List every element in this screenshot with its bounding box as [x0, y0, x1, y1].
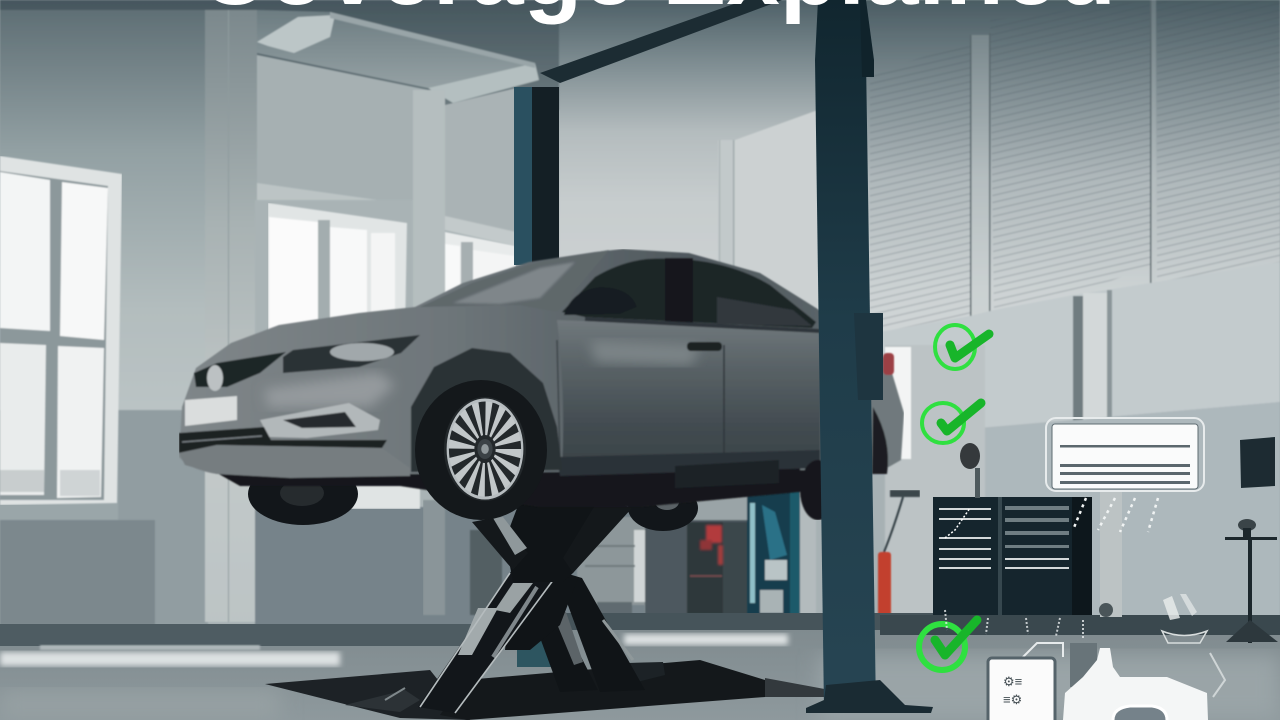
- car: [179, 249, 904, 520]
- window patch under car: [335, 485, 420, 509]
- wing mirror: [564, 287, 637, 315]
- dark wall: [645, 513, 747, 615]
- icon: green check 2: [922, 403, 981, 443]
- windshield: [420, 250, 609, 312]
- bumper lip: [179, 445, 410, 478]
- blind panel A slats: [870, 42, 970, 332]
- engine block: [1063, 648, 1208, 720]
- dashed connectors: [945, 610, 1083, 640]
- red extinguisher: [878, 552, 891, 617]
- fog lamp surround: [260, 403, 380, 438]
- lift pit: [265, 670, 470, 720]
- top crossbeam: [540, 0, 782, 83]
- door handle: [687, 342, 722, 351]
- icon: green check 1: [935, 325, 989, 369]
- wall device: [1240, 437, 1275, 488]
- left wall: [0, 10, 206, 412]
- door panels: [557, 320, 820, 468]
- left window: [0, 156, 122, 505]
- ceiling recess panel: [257, 10, 535, 88]
- ceiling light: [257, 15, 335, 53]
- floor light reflections: [40, 645, 260, 650]
- blind middle right: [445, 88, 516, 232]
- dark shelving with red tools: [687, 522, 723, 614]
- helmet: [960, 443, 980, 469]
- scissor lift: [265, 495, 830, 720]
- panel dividers: [971, 35, 989, 320]
- tail light: [883, 353, 894, 375]
- rear overhang: [800, 308, 904, 473]
- icon: green check 3: [919, 620, 977, 670]
- left lift post: [514, 0, 782, 265]
- under body arm: [217, 462, 820, 507]
- exhaust: [1162, 631, 1207, 643]
- blind middle left: [257, 55, 428, 220]
- icon: engine with clipboard: ≡⚙: [1003, 692, 1022, 707]
- blind panel B slats: [990, 0, 1150, 310]
- wall below window row: [255, 200, 515, 510]
- radiator panel: [0, 520, 155, 625]
- grey cabinet: [577, 517, 645, 605]
- upper arms and centre mass: [505, 495, 622, 582]
- panel behind car: [735, 110, 818, 335]
- clipboard: [988, 658, 1055, 720]
- pipe: [1100, 492, 1122, 617]
- right upper wall gradient: [818, 0, 1280, 345]
- centre crossing: [505, 575, 578, 650]
- icon: air conditioner: [1046, 418, 1204, 532]
- left wainscot: [118, 410, 208, 625]
- licence plate: [185, 396, 237, 426]
- lower right legs: [555, 570, 645, 692]
- floor: [0, 613, 1280, 720]
- base steps: [440, 660, 765, 720]
- light strip beam: [428, 63, 539, 103]
- headlight: [283, 335, 420, 373]
- airflow dashes: [1073, 498, 1158, 532]
- lower right wall: [985, 402, 1280, 630]
- rear near wheel: [872, 407, 888, 474]
- car body: [179, 249, 860, 474]
- lower right upper wall: [880, 262, 1280, 430]
- far left wheel: [248, 463, 358, 525]
- teal mechanism: [517, 640, 551, 667]
- side windows: [562, 259, 816, 328]
- lower left leg: [418, 560, 568, 713]
- fender highlight: [264, 372, 395, 408]
- icon: engine with clipboard: ⚙≡: [1003, 674, 1022, 689]
- grille: [194, 352, 286, 387]
- wheel rim spokes: [448, 400, 522, 498]
- blind panel C slats: [1157, 0, 1280, 285]
- far rear wheel: [628, 485, 698, 531]
- blue cabinet: [747, 490, 790, 617]
- lower grille: [179, 427, 387, 453]
- floor stand: [1225, 537, 1277, 540]
- right lift post: [806, 0, 933, 713]
- window pillar: [413, 90, 445, 310]
- wheel arch: [411, 348, 562, 472]
- middle window: [268, 203, 516, 509]
- tool chest: [933, 497, 1092, 615]
- column: [205, 10, 257, 622]
- icon: engine with clipboard: [945, 594, 1225, 720]
- wall centre right of left post: [559, 0, 821, 335]
- background equipment: [423, 490, 920, 617]
- pale pillar and dark figure: [423, 500, 445, 615]
- sill band: [557, 450, 820, 476]
- character line: [585, 319, 820, 331]
- top band and ceiling: [0, 0, 560, 110]
- lower wall: [255, 507, 645, 627]
- shoulder highlight: [590, 340, 700, 365]
- wall items: [960, 437, 1278, 643]
- engine hose arc: [1023, 643, 1063, 657]
- front wheel: [415, 380, 547, 520]
